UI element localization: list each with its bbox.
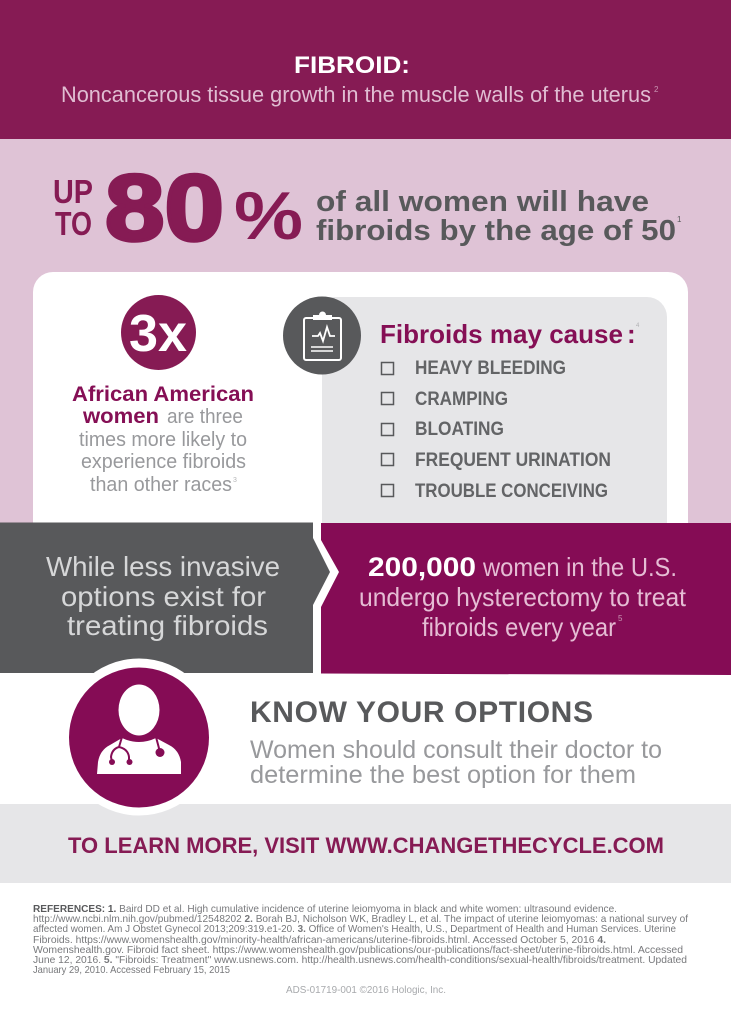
icon: clipboard [283, 296, 361, 374]
heading: know your options: KNOW YOUR OPTIONS [250, 696, 593, 729]
text: definition: Noncancerous tissue growth in the muscle walls of the uterus [61, 82, 651, 107]
panel: pink statistic background [0, 139, 731, 523]
text: African American women: than other races [90, 474, 232, 496]
statistic: up to 80 percent: TO [55, 205, 92, 242]
text: consult your doctor: determine the best option for them [250, 761, 636, 789]
badge: 3x: 3x [129, 305, 187, 363]
text: consult your doctor: Women should consult their doctor to [250, 736, 662, 764]
text: references: Fibroids. https://www.womenshealth.gov/minority-health/african-americans/uterine-fibroids.html. Accessed October 5, 2016 4. [33, 934, 606, 946]
panel: hysterectomy statistic [321, 523, 731, 675]
text: African American women: experience fibroids [81, 451, 246, 473]
symptom: trouble conceiving: TROUBLE CONCEIVING [415, 481, 608, 502]
text: references: affected women. Am J Obstet Gynecol 2013;209:319.e1-20. 3. Office of Women's Health, U.S., Department of Health and Human Services. Uterine [33, 923, 676, 935]
panel: hysterectomy statistic: undergo hysterectomy to treat [359, 582, 687, 612]
statistic: up to 80 percent: UP [53, 173, 93, 210]
text: references: January 29, 2010. Accessed February 15, 2015 [33, 964, 230, 976]
text: references: http://www.ncbi.nlm.nih.gov/pubmed/12548202 2. Borah BJ, Nicholson WK, Bradley L, et al. The impact of uterine leiomyomas: a national survey of [33, 913, 688, 925]
symptom: heavy bleeding: HEAVY BLEEDING [415, 358, 566, 379]
symptom: cramping: CRAMPING [415, 389, 508, 410]
text: consult your doctor [250, 736, 662, 789]
text: African American women: times more likely to [79, 429, 247, 451]
text: statistic description: of all women will have [316, 186, 649, 218]
panel: hysterectomy statistic: women in the U.S. [482, 552, 677, 582]
icon: doctor [60, 658, 218, 816]
panel: less invasive options: treating fibroids [67, 610, 268, 641]
symptom: bloating [382, 419, 504, 440]
text: African American women: women [82, 405, 159, 428]
symptom: frequent urination: FREQUENT URINATION [415, 450, 611, 471]
panel: call to action band [0, 804, 731, 883]
text: references: Womenshealth.gov. Fibroid fact sheet. https://www.womenshealth.gov/publications/our-publications/fact-sheet/uterine-fibroids.html. Accessed [33, 944, 683, 956]
badge: 3x [121, 295, 196, 370]
heading: fibroids may cause: : [627, 319, 636, 349]
panel: less invasive options: options exist for [61, 581, 266, 612]
symptom: cramping [382, 389, 508, 410]
text: learn more link: TO LEARN MORE, VISIT WWW.CHANGETHECYCLE.COM [68, 833, 664, 858]
panel: fibroids may cause: 4 [636, 323, 640, 329]
panel: hysterectomy statistic: fibroids every year [422, 612, 616, 642]
panel: hysterectomy statistic: 5 [618, 614, 623, 623]
text: African American women: are three [167, 406, 243, 428]
text: references [33, 903, 688, 976]
panel: fibroids may cause [322, 297, 667, 523]
statistic: up to 80 percent [53, 155, 303, 260]
heading: fibroid: FIBROID: [294, 52, 410, 79]
panel: less invasive options: While less invasive [46, 551, 280, 582]
panel: header band [0, 0, 731, 139]
panel: hysterectomy statistic: 200,000 [368, 552, 476, 582]
text: copyright: ADS-01719-001 ©2016 Hologic, Inc. [286, 984, 446, 996]
heading: fibroids may cause: Fibroids may cause [380, 319, 623, 349]
text: statistic description: fibroids by the age of 50 [316, 215, 676, 247]
text: statistic description: 1 [677, 215, 682, 224]
panel: white content card [33, 272, 688, 523]
text: African American women: African American [72, 383, 254, 406]
text: African American women: 3 [233, 477, 237, 484]
text: references: June 12, 2016. 5. "Fibroids: Treatment" www.usnews.com. http://health.usnews.com/health-conditions/sexual-health/fibroids/treatment. Updated [33, 954, 687, 966]
symptom: bloating: BLOATING [415, 419, 504, 440]
text: definition: 2 [654, 85, 659, 94]
text: statistic description [316, 186, 682, 247]
text: references: REFERENCES: 1. Baird DD et al. High cumulative incidence of uterine leiomyoma in black and white women: ultrasound evidence. [33, 903, 617, 915]
text: African American women [72, 383, 254, 496]
statistic: up to 80 percent: % [234, 178, 303, 254]
panel: less invasive options [0, 522, 330, 673]
statistic: up to 80 percent: 80 [105, 155, 224, 260]
